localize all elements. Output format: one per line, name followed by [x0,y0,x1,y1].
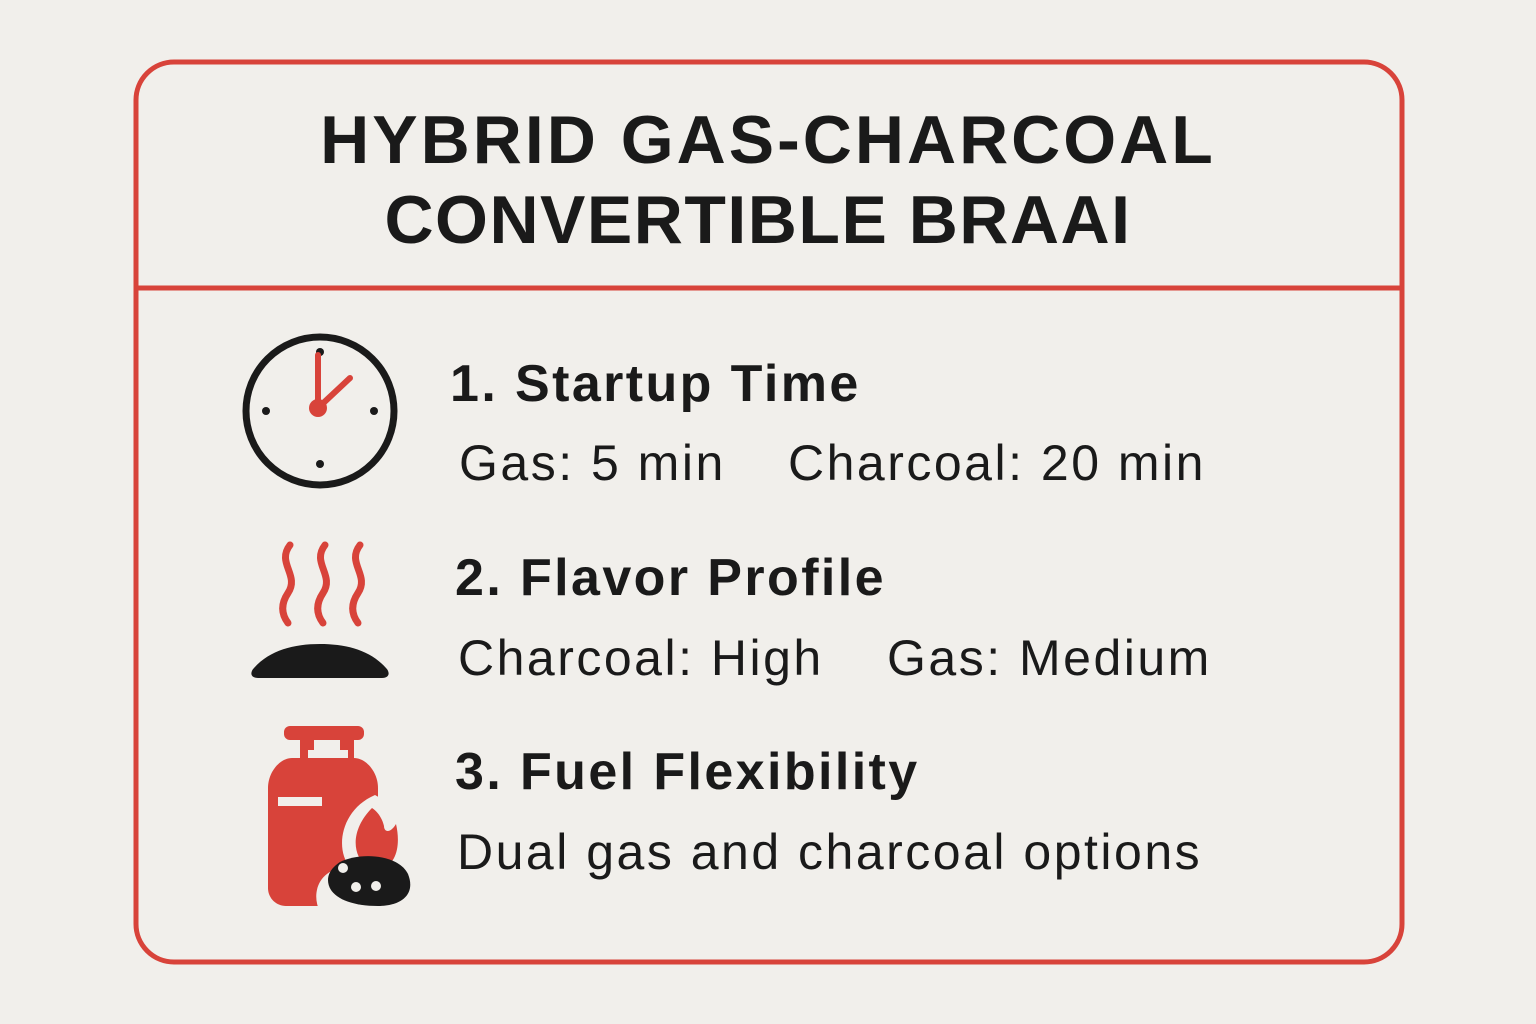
icon: clock [246,337,394,485]
panel: frame [136,62,1402,962]
icon: heat over coal [251,545,389,678]
text: flavor values [458,630,1212,686]
icon: gas cylinder with charcoal flame [268,726,416,918]
text: startup values [459,435,1206,491]
text: fuel description: Dual gas and charcoal options [457,824,1202,880]
heading: startup time: 1. Startup Time [450,355,861,413]
title: CONVERTIBLE BRAAI [384,182,1132,258]
text: startup values: Charcoal: 20 min [788,435,1206,491]
title: HYBRID GAS-CHARCOAL [320,102,1216,178]
text: flavor values: Gas: Medium [887,630,1212,686]
heading: flavor profile: 2. Flavor Profile [455,549,886,607]
text: startup values: Gas: 5 min [459,435,726,491]
heading: fuel flexibility: 3. Fuel Flexibility [455,743,920,801]
text: flavor values: Charcoal: High [458,630,824,686]
title [320,102,1216,258]
